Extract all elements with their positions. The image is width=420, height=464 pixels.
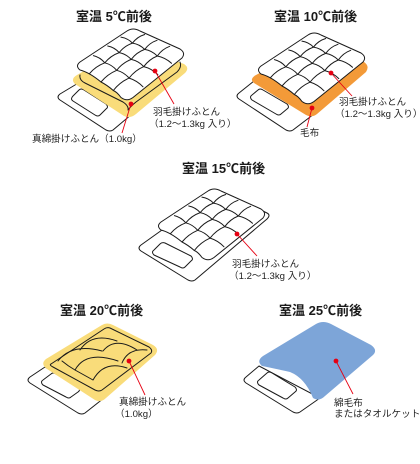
callout: blanket: 毛布 bbox=[300, 127, 320, 139]
icon: yellow floss quilt bbox=[73, 44, 187, 117]
callout: cotton blanket: 綿毛布 bbox=[334, 397, 363, 409]
callout: floss quilt: 真綿掛けふとん（1.0kg） bbox=[32, 133, 142, 145]
icon: down quilt bbox=[158, 189, 265, 260]
callout: cotton blanket: またはタオルケット bbox=[334, 409, 420, 420]
callout: down quilt: （1.2〜1.3kg 入り） bbox=[149, 118, 236, 130]
callout: down quilt: 羽毛掛けふとん bbox=[339, 96, 407, 108]
callout: down quilt bbox=[149, 69, 236, 130]
title: 5°C: 室温 5℃前後 bbox=[76, 9, 152, 24]
icon: yellow floss quilt bbox=[43, 324, 157, 401]
panel: room temperature 20°C bbox=[28, 303, 187, 420]
callout: down quilt: 羽毛掛けふとん bbox=[232, 258, 300, 270]
title: 10°C: 室温 10℃前後 bbox=[274, 9, 357, 24]
panel: room temperature 5°C bbox=[32, 9, 236, 145]
icon: mattress and pillow bbox=[139, 200, 269, 281]
icon: down quilt bbox=[78, 29, 184, 100]
icon: mattress and pillow bbox=[237, 81, 314, 131]
callout: down quilt: （1.2〜1.3kg 入り） bbox=[229, 270, 316, 282]
icon: mattress and pillow bbox=[244, 366, 320, 413]
callout: blanket bbox=[300, 106, 320, 139]
callout: down quilt bbox=[329, 71, 420, 120]
panel: room temperature 25°C bbox=[244, 303, 420, 420]
icon: mattress and pillow bbox=[58, 82, 132, 131]
panel: room temperature 10°C bbox=[237, 9, 420, 139]
callout: down quilt: （1.2〜1.3kg 入り） bbox=[335, 108, 420, 120]
icon: blue cotton blanket bbox=[259, 322, 375, 400]
icon: orange blanket bbox=[252, 46, 368, 116]
callout: floss quilt: 真綿掛けふとん bbox=[119, 396, 187, 408]
icon: mattress and pillow bbox=[28, 367, 104, 414]
callout: floss quilt bbox=[115, 359, 187, 420]
callout: floss quilt bbox=[32, 102, 142, 145]
callout: down quilt bbox=[229, 232, 316, 282]
icon: down quilt bbox=[258, 33, 365, 104]
title: 20°C: 室温 20℃前後 bbox=[60, 303, 143, 318]
callout: down quilt: 羽毛掛けふとん bbox=[153, 106, 221, 118]
title: 15°C: 室温 15℃前後 bbox=[182, 161, 265, 176]
callout: cotton blanket bbox=[334, 359, 420, 420]
panel: room temperature 15°C bbox=[139, 161, 316, 282]
callout: floss quilt: （1.0kg） bbox=[115, 408, 158, 420]
title: 25°C: 室温 25℃前後 bbox=[279, 303, 362, 318]
